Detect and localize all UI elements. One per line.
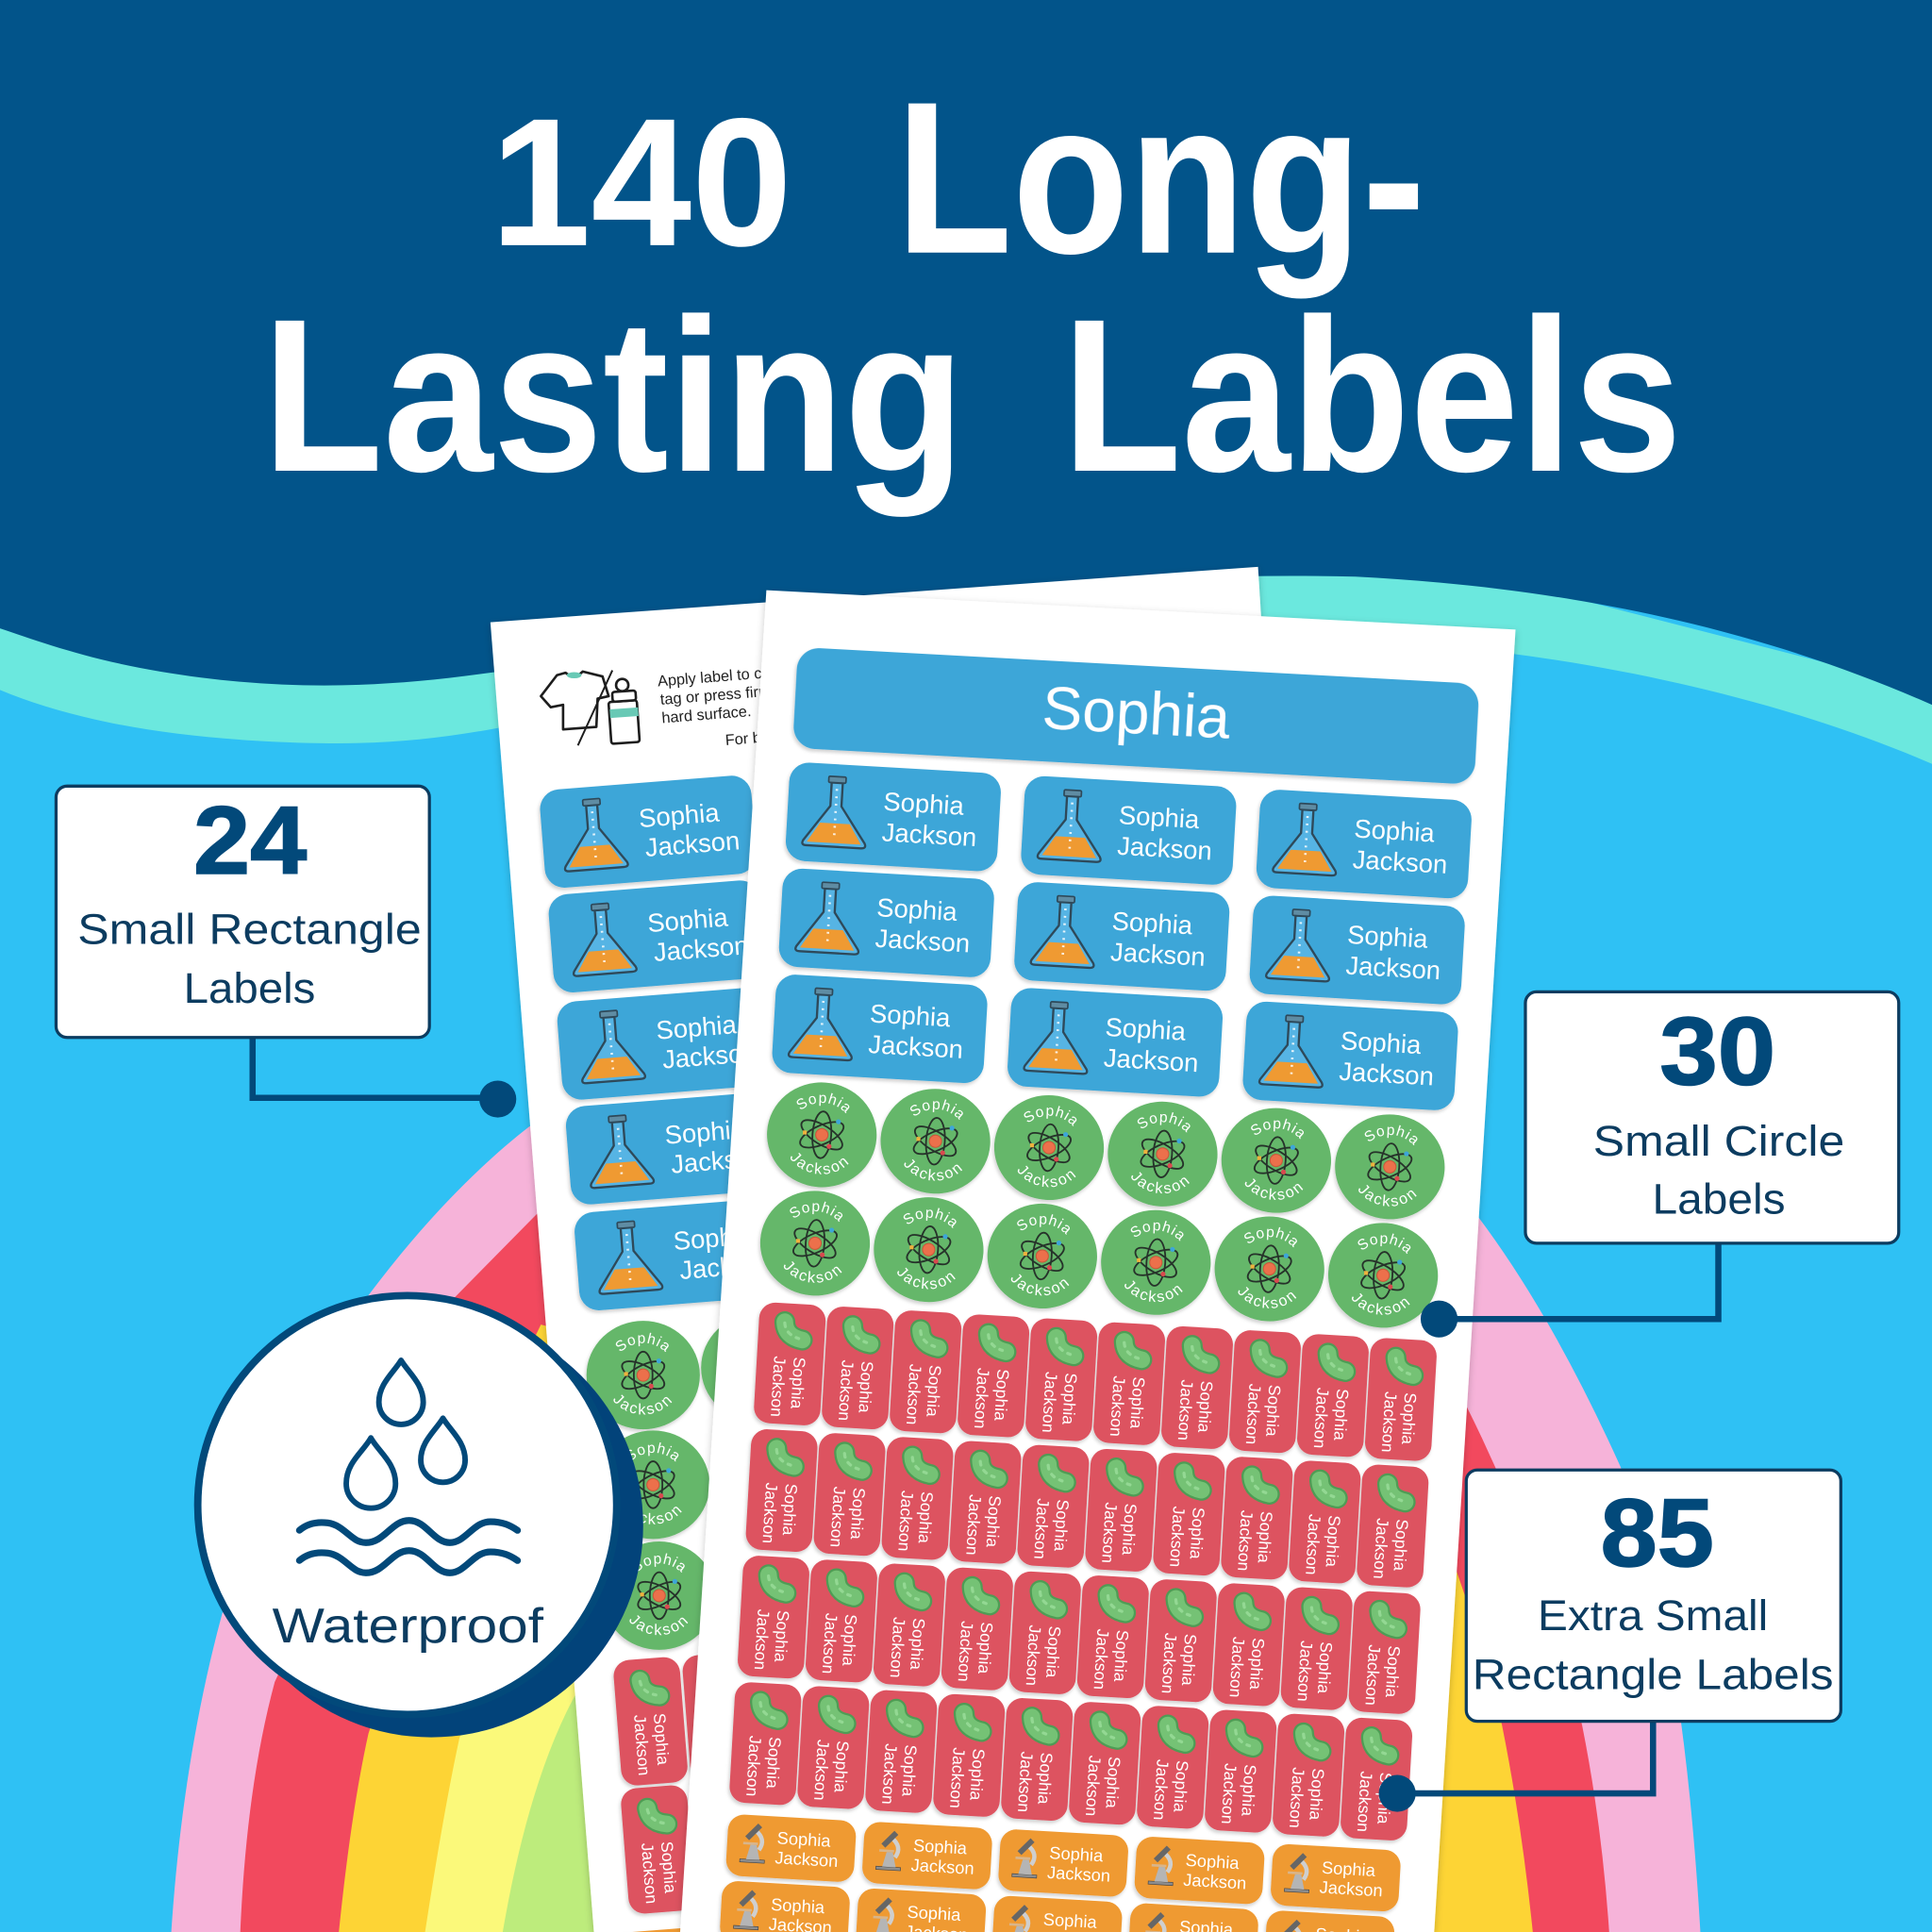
circle label row 2: Sophia [1130, 1221, 1183, 1241]
red label row 1: Jackson [971, 1367, 993, 1429]
blue label row 3: Jackson [1339, 1057, 1435, 1091]
callout: 24 small rectangle labels: Small Rectangle [77, 905, 422, 953]
blue label row 2 [778, 868, 1466, 1006]
red label row 1: Sophia [787, 1357, 809, 1409]
instructions text [657, 664, 775, 754]
red label row 4: Sophia [966, 1748, 989, 1801]
blue label row 3: Jackson [1103, 1042, 1199, 1077]
back sheet blue flask labels: Sophia [638, 797, 721, 833]
circle label row 1: Jackson [1131, 1172, 1190, 1194]
blue label row 3: Jackson [868, 1029, 964, 1064]
red label row 1: Sophia [1262, 1384, 1284, 1437]
callout: 30 small circle labels [1421, 991, 1899, 1338]
red label row 3: Jackson [887, 1616, 908, 1678]
red label row 2: Jackson [1166, 1506, 1189, 1568]
back sheet green atom labels [584, 1321, 719, 1654]
red label row 2: Jackson [758, 1482, 781, 1544]
red label row 2: Jackson [962, 1494, 985, 1556]
red label row 1: Jackson [767, 1356, 790, 1418]
red label row 2: Jackson [1370, 1518, 1392, 1579]
red label row 3 [737, 1555, 1422, 1715]
circle label row 2: Jackson [1352, 1292, 1409, 1315]
circle label row 2: Jackson [897, 1268, 956, 1289]
blue label row 1: Sophia [1118, 800, 1201, 834]
circle label row 1: Jackson [1245, 1178, 1304, 1200]
callout: 85 extra small rectangle labels: 85 [1601, 1479, 1714, 1587]
orange label row 2: Sophia [907, 1902, 962, 1924]
blue label row 3: Sophia [1105, 1012, 1188, 1046]
red label row 4: Sophia [763, 1736, 785, 1790]
red label row 1: Jackson [835, 1359, 858, 1422]
red label row 4: Jackson [1082, 1755, 1105, 1817]
blue label row 1: Jackson [881, 817, 977, 852]
teal wave band [0, 542, 1932, 764]
callout: 24 small rectangle labels: 24 [193, 787, 308, 894]
back sheet blue flask labels: Jackson [678, 1248, 775, 1285]
red label row 4 [728, 1681, 1413, 1841]
title: Labels [1062, 274, 1682, 517]
blue label row 2: Jackson [1109, 937, 1206, 972]
blue label row 1: Sophia [883, 787, 965, 821]
red label row 4: Jackson [810, 1739, 833, 1801]
circle label row 1: Jackson [1017, 1166, 1075, 1187]
red label row 3: Jackson [819, 1612, 841, 1674]
red label row 2: Jackson [1302, 1513, 1324, 1575]
red label row 1 [753, 1302, 1438, 1461]
red label row 4: Sophia [898, 1744, 921, 1797]
red label row 2: Jackson [1030, 1498, 1053, 1559]
circle label row 1: Sophia [1138, 1112, 1191, 1132]
callout: 85 extra small rectangle labels [1379, 1470, 1840, 1812]
title: Lasting [262, 274, 965, 517]
red label row 4: Jackson [1354, 1771, 1376, 1833]
orange label row 2: Sophia [771, 1894, 825, 1917]
red label row 3: Jackson [955, 1621, 976, 1682]
dark blue header area [0, 0, 1932, 705]
orange label row 1: Jackson [1183, 1870, 1247, 1893]
red label row 1: Sophia [855, 1360, 877, 1413]
instructions text: hard surface. [661, 703, 752, 726]
circle label row 1: Sophia [909, 1099, 963, 1120]
title [262, 57, 1682, 517]
red label row 2: Sophia [915, 1491, 937, 1544]
front label sheet [677, 591, 1519, 1932]
red label row 2: Sophia [779, 1483, 801, 1536]
back sheet red bean labels: Sophia [658, 1840, 680, 1894]
orange label row 1: Sophia [913, 1835, 968, 1858]
back sheet blue flask labels: Sophia [673, 1220, 756, 1256]
circle label row 1: Jackson [1358, 1185, 1417, 1207]
red label row 3: Jackson [751, 1608, 773, 1671]
back sheet blue flask labels: Sophia [663, 1114, 747, 1150]
red label row 4: Jackson [1286, 1767, 1308, 1828]
blue label row 1: Sophia [1354, 814, 1436, 847]
blue label row 1: Jackson [1352, 844, 1448, 879]
back sheet red bean labels: Jackson [638, 1842, 661, 1905]
red label row 2: Sophia [1119, 1503, 1141, 1556]
back sheet blue flask labels: Jackson [670, 1142, 767, 1179]
red label row 3: Sophia [1042, 1625, 1064, 1678]
circle label row 2: Jackson [1124, 1280, 1183, 1302]
small rectangle labels: flask [771, 761, 1473, 1111]
blue label row 2: Sophia [875, 892, 958, 926]
circle label row 2: Sophia [790, 1202, 843, 1223]
red label row 2: Sophia [1187, 1507, 1208, 1559]
circle label row 1: Sophia [1024, 1106, 1077, 1126]
orange microscope labels [719, 1814, 1402, 1932]
red label row 3: Sophia [974, 1622, 996, 1674]
red label row 4: Sophia [1306, 1768, 1327, 1821]
red label row 1: Sophia [1330, 1388, 1352, 1441]
red label row 4: Sophia [1374, 1772, 1395, 1824]
back sheet green atom labels: Jackson [643, 1507, 682, 1524]
red label row 2: Sophia [1323, 1515, 1344, 1568]
waterproof caption: Waterproof [273, 1599, 544, 1654]
circle label row 2: Jackson [1011, 1274, 1070, 1296]
orange label row 1: Jackson [774, 1847, 839, 1871]
orange label row 1: Jackson [1319, 1877, 1383, 1900]
red label row 4: Sophia [1238, 1764, 1259, 1817]
circle label row 2: Sophia [1357, 1234, 1411, 1255]
blue label row 2: Jackson [874, 924, 971, 958]
red label row 3: Jackson [1158, 1632, 1180, 1694]
red label row 3: Sophia [839, 1614, 860, 1667]
red label row 4: Jackson [1150, 1758, 1173, 1821]
red label row 2 [745, 1428, 1429, 1589]
orange label row 1: Sophia [1049, 1842, 1105, 1865]
orange label row 1: Jackson [910, 1855, 974, 1878]
red label row 4: Jackson [1218, 1763, 1241, 1824]
callout: 85 extra small rectangle labels: Rectangle Labels [1473, 1651, 1834, 1699]
icon: water drops [346, 1360, 465, 1508]
red label row 3: Jackson [1023, 1624, 1044, 1687]
back sheet red bean labels: Sophia [650, 1712, 673, 1766]
circle label row 1: Jackson [791, 1153, 849, 1174]
callout: 85 extra small rectangle labels: Extra Small [1538, 1591, 1768, 1640]
back sheet green atom labels: Sophia [638, 1553, 685, 1573]
title: Long- [896, 57, 1425, 299]
red label row 3: Jackson [1361, 1644, 1384, 1706]
extra small rectangle labels: red bean [728, 1302, 1438, 1841]
circle label row 2: Sophia [904, 1208, 957, 1228]
back sheet blue flask labels: Sophia [655, 1009, 739, 1045]
orange label row 1: Sophia [776, 1827, 832, 1851]
back sheet green atom labels: Sophia [629, 1442, 679, 1462]
header banner: Sophia: Sophia [1041, 674, 1232, 752]
red label row 1: Jackson [903, 1363, 925, 1425]
red label row 4: Sophia [1170, 1760, 1192, 1813]
waterproof badge [198, 1295, 643, 1738]
red label row 2: Sophia [847, 1487, 869, 1541]
instructions text: For b [724, 729, 761, 749]
back sheet blue flask labels [539, 774, 792, 1312]
red label row 1: Sophia [1058, 1373, 1080, 1425]
red label row 3: Sophia [907, 1618, 928, 1671]
back sheet blue flask labels: Jackson [653, 930, 749, 967]
red label row 4: Sophia [831, 1740, 853, 1793]
red label row 4: Jackson [1014, 1751, 1037, 1813]
red label row 1: Jackson [1039, 1372, 1061, 1433]
red label row 3: Jackson [1226, 1636, 1248, 1698]
circle label row 2: Jackson [1238, 1287, 1296, 1308]
red label row 1: Sophia [991, 1369, 1012, 1422]
red label row 1: Jackson [1310, 1387, 1332, 1449]
red label row 1: Jackson [1242, 1383, 1264, 1445]
red label row 4: Sophia [1102, 1756, 1124, 1809]
icon: shirt and bottle care [541, 671, 640, 745]
red label row 2: Sophia [1255, 1510, 1276, 1564]
blue label row 3 [771, 974, 1459, 1111]
back sheet green atom labels: Jackson [613, 1394, 672, 1415]
callout: 30 small circle labels: Labels [1653, 1175, 1786, 1224]
red label row 3: Jackson [1294, 1641, 1316, 1702]
circle label row 2: Jackson [783, 1261, 841, 1283]
orange label row 1 [725, 1814, 1402, 1912]
red label row 2: Jackson [894, 1490, 917, 1552]
red label row 2: Jackson [1234, 1509, 1257, 1572]
callout: 30 small circle labels: Small Circle [1593, 1117, 1844, 1165]
orange label row 2 [719, 1880, 1395, 1932]
circle label row 1: Sophia [796, 1092, 849, 1113]
red label row 4: Jackson [946, 1747, 969, 1809]
header banner: Sophia [792, 647, 1479, 785]
red label row 3: Sophia [1382, 1645, 1404, 1698]
back label sheet [489, 566, 1264, 1932]
red label row 2: Jackson [1098, 1502, 1121, 1564]
red label row 1: Sophia [923, 1364, 944, 1418]
back sheet green atom labels: Sophia [615, 1332, 669, 1353]
circle label row 1: Sophia [1251, 1119, 1304, 1140]
red label row 3: Sophia [1178, 1633, 1200, 1687]
callout: 24 small rectangle labels: Labels [184, 964, 315, 1012]
orange label row 2: Sophia [1042, 1909, 1098, 1932]
circle label row 1: Jackson [904, 1158, 962, 1181]
red label row 1: Sophia [1126, 1376, 1148, 1429]
circle label row 2 [758, 1191, 1438, 1332]
back sheet blue flask labels: Jackson [661, 1038, 758, 1074]
red label row 3: Sophia [1314, 1641, 1336, 1694]
blue label row 1 [785, 761, 1473, 899]
orange label row 1: Sophia [1321, 1857, 1376, 1880]
red label row 2: Jackson [826, 1486, 849, 1548]
icon: waves [299, 1521, 518, 1573]
circle label row 1: Sophia [1364, 1124, 1417, 1145]
red label row 1: Sophia [1194, 1380, 1216, 1433]
instructions text: tag or press firm [659, 683, 772, 708]
red label row 1: Jackson [1378, 1391, 1400, 1453]
red label row 4: Jackson [878, 1743, 901, 1805]
back sheet red bean labels [612, 1651, 765, 1932]
blue label row 1: Jackson [1116, 831, 1213, 866]
back sheet red bean labels: Jackson [630, 1714, 654, 1776]
back sheet blue flask labels: Jackson [644, 825, 741, 862]
back sheet blue flask labels: Sophia [646, 902, 729, 938]
red label row 4: Sophia [1034, 1752, 1057, 1805]
blue label row 2: Sophia [1111, 907, 1194, 940]
callout: 30 small circle labels: 30 [1659, 997, 1775, 1105]
rainbow [172, 1126, 1700, 1932]
red label row 1: Jackson [1174, 1379, 1197, 1441]
blue label row 2: Jackson [1345, 951, 1441, 985]
circle label row 2: Sophia [1017, 1214, 1070, 1235]
red label row 3: Jackson [1091, 1628, 1112, 1690]
blue label row 3: Sophia [869, 998, 952, 1032]
instructions text: Apply label to c [657, 665, 762, 690]
small circle labels: atom [758, 1082, 1445, 1332]
back sheet green atom labels: Jackson [629, 1615, 689, 1636]
blue label row 2: Sophia [1346, 920, 1429, 954]
red label row 1: Sophia [1398, 1392, 1420, 1445]
red label row 2: Sophia [1391, 1519, 1412, 1572]
red label row 4: Jackson [742, 1735, 765, 1797]
blue label row 3: Sophia [1340, 1025, 1423, 1059]
callout: 24 small rectangle labels [56, 786, 516, 1118]
red label row 1: Jackson [1107, 1375, 1129, 1437]
circle label row 2: Sophia [1244, 1226, 1297, 1247]
red label row 3: Sophia [771, 1609, 792, 1662]
red label row 2: Sophia [983, 1495, 1005, 1548]
red label row 3: Sophia [1246, 1638, 1268, 1690]
red label row 2: Sophia [1051, 1499, 1073, 1552]
orange label row 1: Jackson [1046, 1862, 1111, 1886]
orange label row 1: Sophia [1185, 1850, 1241, 1873]
title: 140 [491, 80, 792, 284]
red label row 3: Sophia [1110, 1629, 1132, 1682]
circle label row 1 [764, 1082, 1445, 1223]
